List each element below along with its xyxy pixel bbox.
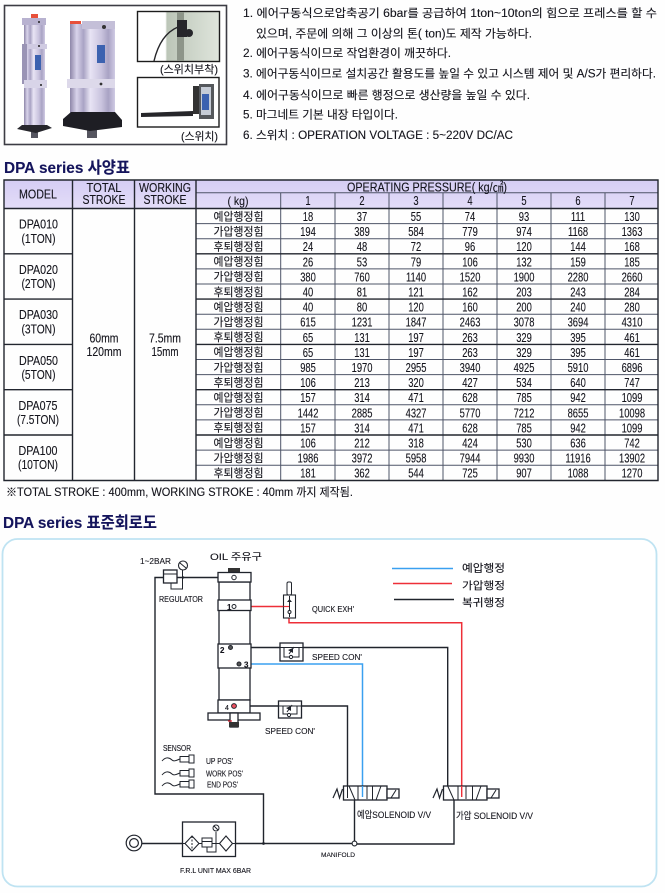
table values: 7944: [460, 452, 480, 466]
table values: 10098: [619, 407, 645, 421]
solenoid valve: pre-pressure: [333, 786, 399, 800]
row labels: 가압행정힘: [214, 452, 264, 465]
row labels: 가압행정힘: [214, 226, 264, 238]
heading: standard circuit diagram: DPA series 표준회로도: [3, 514, 157, 532]
solenoid valve: pressurize: [433, 786, 499, 800]
model names: (1TON): [22, 232, 56, 246]
air line: pressurize (red): [234, 606, 462, 786]
label: lower speed controller: SPEED CON': [265, 726, 315, 736]
table values: 72: [411, 241, 421, 255]
table values: 9930: [514, 452, 534, 466]
label: regulator: REGULATOR: [159, 594, 203, 604]
table values: 395: [570, 347, 586, 360]
table values: 13902: [619, 452, 645, 466]
table values: 3078: [514, 317, 534, 330]
table values: 157: [300, 422, 316, 436]
table values: 380: [300, 271, 316, 285]
row labels: 후퇴행정힘: [214, 331, 264, 344]
model names: (3TON): [22, 322, 56, 336]
table values: 79: [411, 256, 421, 270]
upper speed controller: [280, 643, 303, 661]
table values: 1442: [298, 407, 318, 421]
sensor labels: SENSOR: [163, 744, 191, 753]
table values: 2955: [406, 362, 426, 375]
table values: 6896: [622, 362, 642, 375]
table header background: [4, 180, 658, 208]
table values: 471: [408, 392, 424, 406]
photo caption: switch attached: (스위치부착): [160, 63, 218, 76]
table values: 93: [519, 211, 529, 224]
table values: 471: [408, 422, 424, 436]
table values: 1970: [352, 362, 372, 375]
table values: 194: [300, 226, 316, 239]
label: pressure: 1~2BAR: [140, 556, 171, 566]
table values: 40: [303, 286, 313, 300]
pressure column numbers: 2: [359, 195, 365, 208]
table values: 785: [516, 422, 532, 436]
model names: (5TON): [22, 368, 56, 382]
table values: 1099: [622, 392, 642, 406]
label: oil port: OIL 주유구: [210, 552, 262, 563]
table values: 3694: [568, 317, 588, 330]
table values: 263: [462, 332, 478, 345]
table values: 747: [624, 377, 640, 390]
feature list: 6. 스위치 : OPERATION VOLTAGE : 5~220V DC/AC: [243, 129, 513, 142]
table values: 1986: [298, 452, 318, 466]
table values: 3940: [460, 362, 480, 375]
specification table: [4, 180, 658, 481]
feature list: 5. 마그네트 기본 내장 타입이다.: [243, 108, 398, 122]
table values: 389: [354, 226, 370, 239]
table values: 628: [462, 392, 478, 406]
table values: 907: [516, 468, 532, 481]
F.R.L unit: [182, 822, 236, 856]
table values: 1270: [622, 468, 642, 481]
table grid: [4, 180, 658, 480]
table values: 263: [462, 347, 478, 360]
table values: 197: [408, 347, 424, 360]
table values: 2463: [460, 317, 480, 330]
row labels: 가압행정힘: [214, 316, 264, 329]
sensor labels: END POS': [207, 780, 238, 790]
table values: 5910: [568, 362, 588, 375]
table header labels: TOTAL: [86, 181, 122, 195]
table values: 243: [570, 286, 586, 300]
row labels: 가압행정힘: [214, 407, 264, 420]
table values: 18: [303, 211, 313, 224]
table values: 615: [300, 317, 316, 330]
table values: 65: [303, 332, 313, 345]
table values: 120: [516, 241, 532, 255]
table header labels: OPERATING PRESSURE( kg/㎠): [347, 180, 507, 194]
table values: 106: [462, 256, 478, 270]
table values: 121: [408, 286, 424, 300]
table values: 284: [624, 286, 640, 300]
table values: 1900: [514, 271, 534, 285]
air line: pre-pressure (blue): [240, 664, 362, 786]
table values: 37: [357, 211, 367, 224]
sensor labels: [163, 744, 243, 790]
regulator: [164, 561, 188, 589]
table values: 131: [354, 347, 370, 360]
feature list: 2. 에어구동식이므로 작업환경이 깨끗하다.: [243, 46, 451, 60]
pressure column numbers: 5: [521, 195, 527, 208]
lower speed controller: [278, 701, 302, 718]
model names: (2TON): [22, 277, 56, 291]
table values: 424: [462, 437, 478, 451]
table header labels: WORKING: [139, 181, 191, 195]
table values: 1140: [406, 271, 426, 285]
table values: 132: [516, 256, 532, 270]
table values: 240: [570, 301, 586, 315]
table values: 159: [570, 256, 586, 270]
table values: 162: [462, 286, 478, 300]
label: upper speed controller: SPEED CON': [312, 652, 362, 662]
table values: 2885: [352, 407, 372, 421]
row labels: 예압행정힘: [214, 256, 264, 268]
legend: 예압행정: [462, 562, 505, 574]
total stroke values: [86, 332, 122, 359]
row labels: 가압행정힘: [214, 361, 264, 374]
table header labels: STROKE: [144, 193, 186, 207]
table header labels: MODEL: [19, 188, 57, 202]
table values: 120: [408, 301, 424, 315]
table values: 81: [357, 286, 367, 300]
model names: DPA050: [19, 354, 58, 368]
table values: 742: [624, 437, 640, 451]
table values: 942: [570, 392, 586, 406]
photo: small cylinder: [17, 14, 52, 138]
table values: 314: [354, 392, 370, 406]
air source symbol: [126, 835, 142, 851]
table values: 111: [571, 211, 585, 224]
pressure column numbers: 6: [575, 195, 581, 208]
sensor labels: UP POS': [206, 757, 233, 766]
model names: (10TON): [18, 458, 58, 472]
row labels: 예압행정힘: [214, 210, 264, 224]
row labels: 후퇴행정힘: [214, 376, 264, 389]
table values: 534: [516, 377, 532, 390]
label: F.R.L unit: F.R.L UNIT MAX 6BAR: [180, 868, 251, 875]
table values: 329: [516, 347, 532, 360]
row labels: 후퇴행정힘: [214, 467, 264, 480]
pressure column numbers: 7: [629, 195, 635, 208]
table values: [298, 211, 645, 481]
table values: 318: [408, 437, 424, 451]
row labels: 후퇴행정힘: [214, 422, 264, 435]
model names: DPA020: [19, 263, 58, 277]
sensor labels: WORK POS': [206, 770, 243, 778]
row labels: [214, 210, 264, 480]
table values: 80: [357, 301, 367, 315]
table values: 1168: [568, 226, 588, 239]
table values: 160: [462, 301, 478, 315]
manifold junction: [352, 841, 357, 846]
table header labels: [19, 180, 507, 208]
row labels: 가압행정힘: [214, 271, 264, 284]
table values: 785: [516, 392, 532, 406]
label: quick exhaust: QUICK EXH': [312, 604, 354, 614]
table header labels: STROKE: [82, 193, 126, 207]
table values: 168: [624, 241, 640, 255]
table values: 4327: [406, 407, 426, 421]
table values: 130: [624, 211, 640, 224]
feature list: [243, 6, 657, 142]
table values: 544: [408, 468, 424, 481]
feature list: 4. 에어구동식이므로 빠른 행정으로 생산량을 높일 수 있다.: [243, 88, 530, 102]
table values: 11916: [565, 452, 591, 466]
pressure column numbers: 4: [467, 195, 473, 208]
model names: DPA010: [19, 218, 58, 232]
photo: large cylinder: [63, 21, 122, 138]
table footnote: ※TOTAL STROKE : 400mm, WORKING STROKE : 40mm 까지 제작됨.: [6, 486, 353, 499]
model names: DPA075: [18, 399, 58, 413]
table values: 200: [516, 301, 532, 315]
table values: 197: [408, 332, 424, 345]
working stroke values: [149, 332, 181, 359]
table values: 5770: [460, 407, 480, 421]
table values: 4925: [514, 362, 534, 375]
label: manifold: MANIFOLD: [321, 852, 355, 859]
table values: 461: [624, 347, 640, 360]
table values: 144: [570, 241, 586, 255]
table values: 5958: [406, 452, 426, 466]
table values: 1847: [406, 317, 426, 330]
table values: 1231: [352, 317, 372, 330]
table values: 40: [303, 301, 313, 315]
panel: product photos: [4, 6, 226, 144]
table values: 4310: [622, 317, 642, 330]
cylinder: 1: [227, 603, 232, 612]
row labels: 후퇴행정힘: [214, 240, 264, 254]
table values: 74: [465, 211, 475, 224]
table values: 213: [354, 377, 370, 390]
table values: 55: [411, 211, 421, 224]
table values: 26: [303, 256, 313, 270]
table values: 106: [300, 437, 316, 451]
table values: 24: [303, 241, 313, 255]
cylinder: 3: [244, 660, 249, 670]
table values: 584: [408, 226, 424, 239]
model names: [17, 218, 59, 472]
working stroke values: 15mm: [152, 345, 178, 359]
table values: 320: [408, 377, 424, 390]
table values: 779: [462, 226, 478, 239]
heading: specification table: DPA series 사양표: [4, 159, 130, 177]
table values: 7212: [514, 407, 534, 421]
table values: 725: [462, 468, 478, 481]
table values: 185: [624, 256, 640, 270]
quick exhaust valve: [284, 582, 296, 618]
table values: 395: [570, 332, 586, 345]
legend: 복귀행정: [462, 597, 505, 609]
row labels: 예압행정힘: [214, 346, 264, 359]
table values: 640: [570, 377, 586, 390]
table values: 131: [354, 332, 370, 345]
pressure column numbers: [305, 195, 635, 208]
table values: 8655: [568, 407, 588, 421]
total stroke values: 120mm: [86, 345, 122, 359]
table values: 280: [624, 301, 640, 315]
table values: 1099: [622, 422, 642, 436]
working stroke values: 7.5mm: [149, 332, 181, 346]
pressure column numbers: 3: [413, 195, 419, 208]
table values: 314: [354, 422, 370, 436]
photo: switch attached: [138, 12, 220, 62]
label: pre-pressure solenoid: 예압SOLENOID V/V: [357, 809, 432, 821]
table values: 65: [303, 347, 313, 360]
table values: 985: [300, 362, 316, 375]
table values: 942: [570, 422, 586, 436]
feature list: 있으며, 주문에 의해 그 이상의 톤( ton)도 제작 가능하다.: [256, 26, 532, 40]
panel: circuit diagram: [2, 539, 656, 886]
legend: [392, 562, 505, 609]
table values: 636: [570, 437, 586, 451]
table values: 53: [357, 256, 367, 270]
table values: 974: [516, 226, 532, 239]
feature list: 3. 에어구동식이므로 설치공간 활용도를 높일 수 있고 시스템 제어 및 A/S가 편리하다.: [243, 66, 656, 80]
table values: 329: [516, 332, 532, 345]
photo: switch: [138, 78, 219, 127]
row labels: 예압행정힘: [214, 437, 264, 450]
table values: 530: [516, 437, 532, 451]
air lines: return (black): [142, 578, 454, 844]
table header labels: ( kg): [228, 194, 249, 208]
label: pressurize solenoid: 가압 SOLENOID V/V: [456, 810, 534, 822]
table values: 628: [462, 422, 478, 436]
table values: 212: [354, 437, 370, 451]
table values: 2280: [568, 271, 588, 285]
feature list: 1. 에어구동식으로압축공기 6bar를 공급하여 1ton~10ton의 힘으로 프레스를 할 수: [243, 6, 657, 20]
table values: 1088: [568, 468, 588, 481]
table values: 2660: [622, 271, 642, 285]
row labels: 예압행정힘: [214, 392, 264, 404]
table values: 157: [300, 392, 316, 406]
table values: 48: [357, 241, 367, 255]
cylinder: 4: [225, 705, 229, 712]
table values: 203: [516, 286, 532, 300]
junction dot: [262, 842, 265, 845]
table values: 427: [462, 377, 478, 390]
cylinder: 2: [220, 646, 225, 655]
pressure column numbers: 1: [305, 195, 311, 208]
table values: 1520: [460, 271, 480, 285]
sensors: [162, 755, 194, 788]
model names: DPA100: [18, 444, 58, 458]
model names: DPA030: [19, 308, 58, 322]
table values: 106: [300, 377, 316, 390]
row labels: 예압행정힘: [214, 301, 264, 314]
cylinder: [208, 568, 260, 727]
legend: 가압행정: [462, 579, 505, 592]
row labels: 후퇴행정힘: [214, 286, 264, 299]
table values: 760: [354, 271, 370, 285]
table values: 3972: [352, 452, 372, 466]
table values: 1363: [622, 226, 642, 239]
table values: 461: [624, 332, 640, 345]
table values: 181: [300, 468, 316, 481]
model names: (7.5TON): [17, 413, 59, 427]
total stroke values: 60mm: [90, 332, 118, 346]
photo caption: switch: (스위치): [181, 130, 218, 143]
table values: 362: [354, 468, 370, 481]
table values: 96: [465, 241, 475, 255]
